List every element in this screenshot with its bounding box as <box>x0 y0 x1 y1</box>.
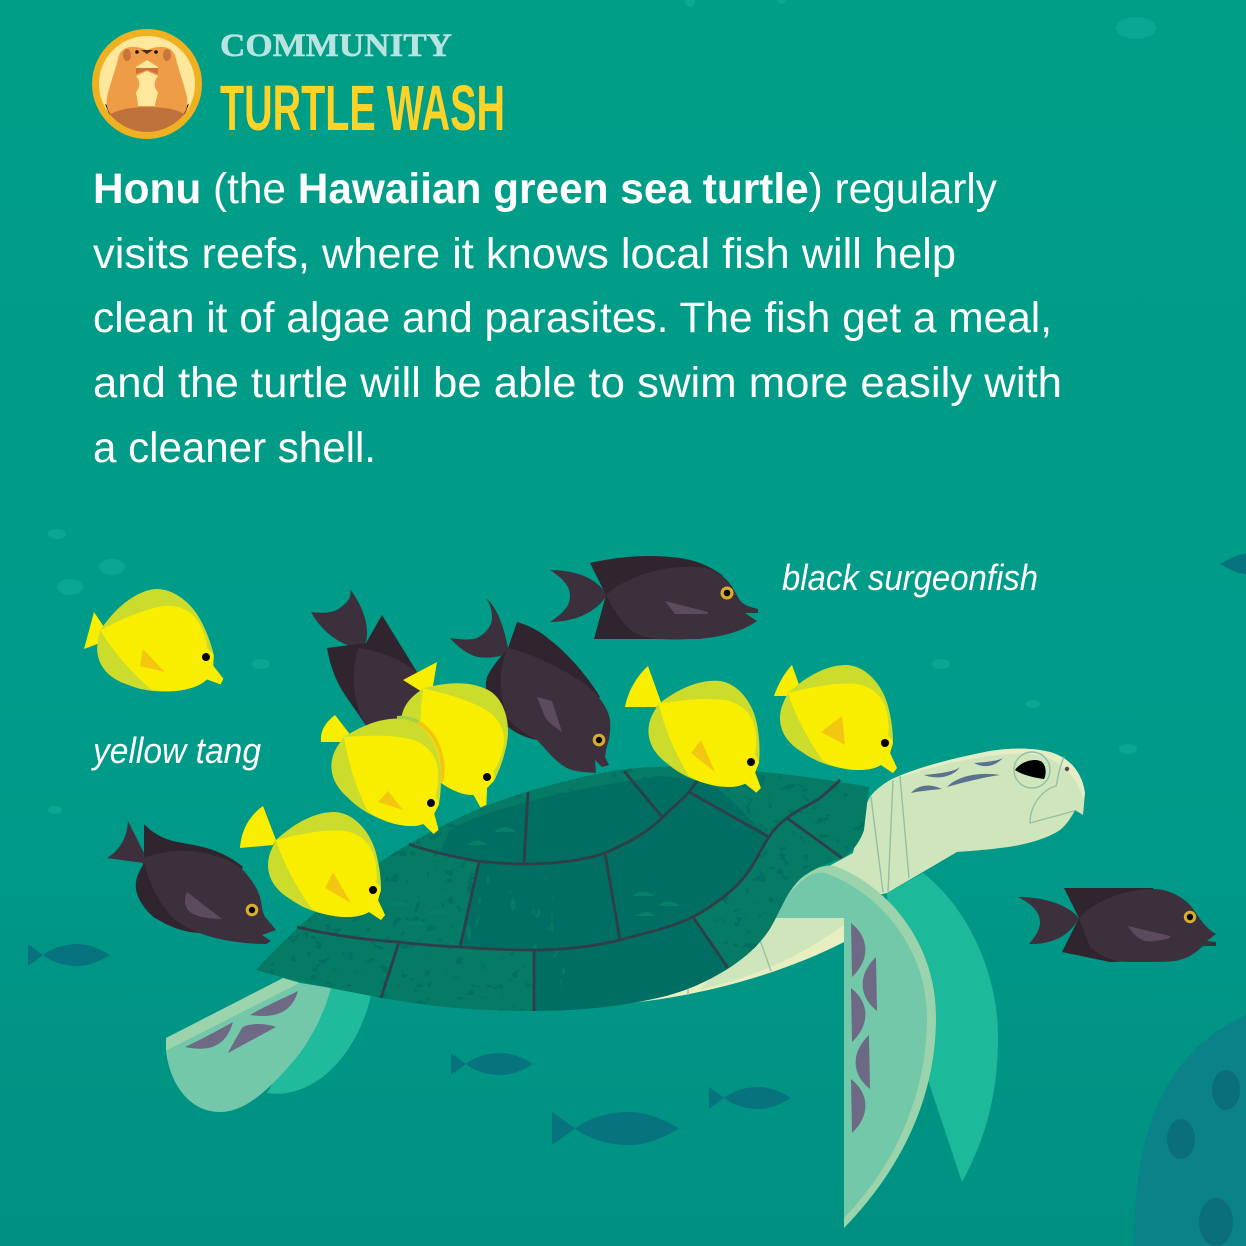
bubbles <box>48 0 1156 814</box>
label: black surgeonfish: black surgeonfish <box>782 557 1038 598</box>
turtle <box>166 749 1085 1228</box>
surgeonfish right <box>1018 888 1216 962</box>
tang behind <box>380 660 533 809</box>
badge: prairie dogs <box>92 29 202 140</box>
tang upper left <box>84 578 224 710</box>
surgeonfish behind yellow tangs <box>311 589 430 745</box>
tang by head <box>774 665 897 773</box>
intro paragraph: and the turtle will be able to swim more easily with <box>93 359 1062 407</box>
shell <box>250 760 880 1020</box>
shell scutes <box>297 771 842 1011</box>
near rear flipper <box>166 978 331 1112</box>
small blue background fish <box>28 553 1246 1145</box>
yellow tang group <box>84 578 897 920</box>
tang on shell <box>625 666 770 793</box>
intro paragraph: Honu (the Hawaiian green sea turtle) regularly <box>93 165 997 213</box>
shell scallop marks <box>388 827 680 925</box>
intro paragraph: clean it of algae and parasites. The fish get a meal, <box>93 294 1052 342</box>
surgeonfish top <box>550 556 758 639</box>
near front flipper <box>775 866 936 1228</box>
plastron <box>630 918 844 1003</box>
far front flipper <box>887 873 998 1182</box>
coral <box>1134 1015 1246 1246</box>
intro paragraph: a cleaner shell. <box>93 424 376 472</box>
section label: community: COMMUNITY <box>220 28 452 64</box>
tang lower left <box>240 806 385 920</box>
head and neck <box>800 749 1085 905</box>
intro paragraph <box>93 165 1062 472</box>
label: yellow tang: yellow tang <box>90 730 261 771</box>
intro paragraph: visits reefs, where it knows local fish will help <box>93 230 956 278</box>
tang centre left <box>321 708 456 835</box>
surgeonfish centre <box>450 598 610 773</box>
surgeonfish lower left <box>107 821 276 944</box>
black surgeonfish group <box>107 556 1216 962</box>
far rear flipper <box>267 985 372 1094</box>
title: turtle wash: TURTLE WASH <box>220 72 505 144</box>
